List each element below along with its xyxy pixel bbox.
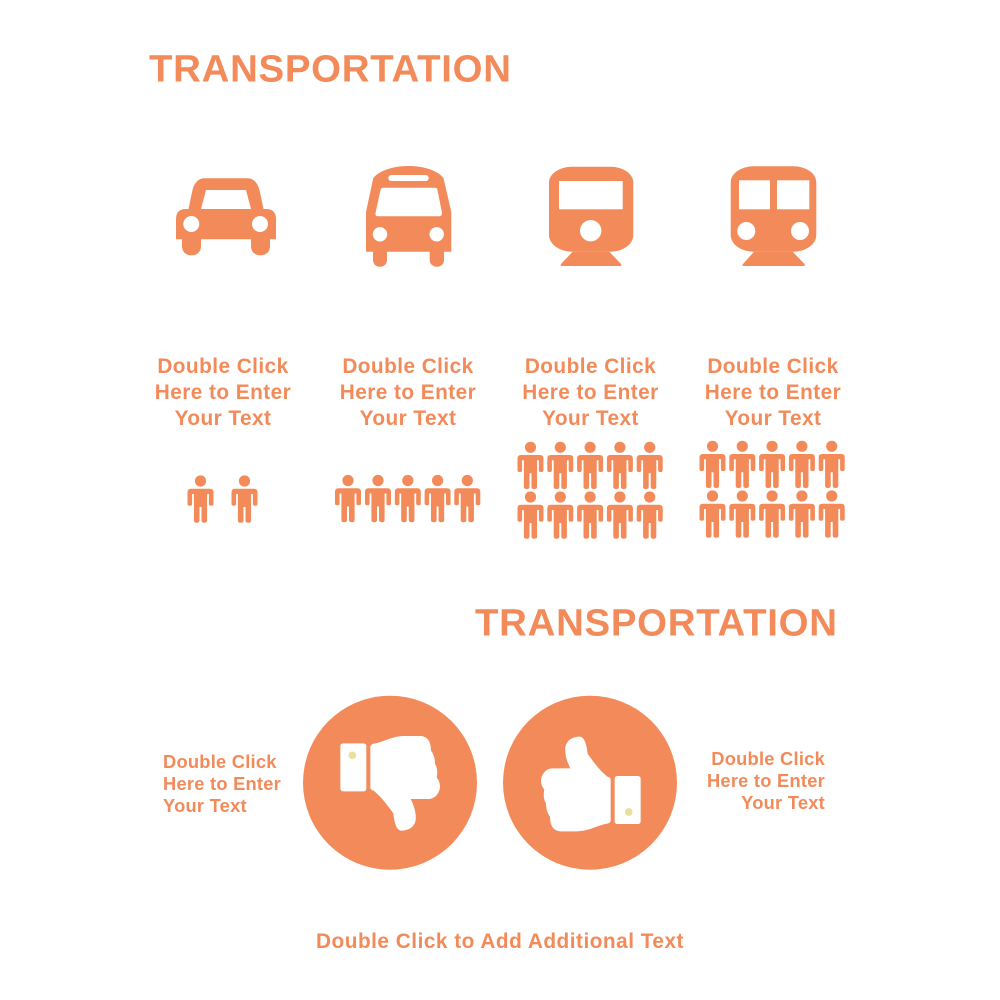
text block: column 4 bbox=[705, 355, 841, 430]
text block: right of thumbs up: Your Text bbox=[741, 792, 825, 813]
icon: train with two windows bbox=[731, 166, 816, 266]
text block: left of thumbs down bbox=[163, 751, 281, 816]
title: second heading: TRANSPORTATION bbox=[475, 602, 837, 645]
people: column 1 bbox=[188, 475, 258, 523]
text block: right of thumbs up bbox=[707, 748, 826, 813]
text block: column 3: Double Click bbox=[525, 355, 656, 378]
footer text: Double Click to Add Additional Text bbox=[316, 930, 684, 953]
icon: thumbs up badge bbox=[503, 696, 677, 870]
text block: column 1: Here to Enter bbox=[155, 381, 291, 404]
people: column 3 bbox=[518, 442, 663, 539]
title: top heading: TRANSPORTATION bbox=[149, 48, 511, 91]
text block: right of thumbs up: Here to Enter bbox=[707, 770, 825, 791]
icon: bus bbox=[366, 166, 451, 267]
people: column 4 bbox=[700, 441, 845, 538]
text block: column 4: Your Text bbox=[725, 407, 821, 430]
text block: column 2: Double Click bbox=[342, 355, 474, 378]
text block: column 4: Here to Enter bbox=[705, 381, 841, 404]
text block: column 1: Your Text bbox=[175, 407, 271, 430]
text block: right of thumbs up: Double Click bbox=[711, 748, 826, 769]
text block: column 2: Here to Enter bbox=[340, 381, 476, 404]
text block: left of thumbs down: Here to Enter bbox=[163, 773, 281, 794]
text block: column 2: Your Text bbox=[360, 407, 456, 430]
icon: thumbs down badge bbox=[303, 696, 477, 870]
icon: car bbox=[176, 178, 276, 255]
text block: column 4: Double Click bbox=[707, 355, 839, 378]
text block: column 1 bbox=[155, 355, 291, 430]
text block: left of thumbs down: Your Text bbox=[163, 795, 247, 816]
icon: train with single window bbox=[549, 167, 633, 266]
text block: column 3: Your Text bbox=[542, 407, 639, 430]
text block: column 3 bbox=[522, 355, 659, 430]
text block: column 2 bbox=[340, 355, 476, 430]
text block: column 1: Double Click bbox=[157, 355, 289, 378]
text block: column 3: Here to Enter bbox=[522, 381, 659, 404]
people: column 2 bbox=[335, 475, 480, 522]
text block: left of thumbs down: Double Click bbox=[163, 751, 277, 772]
